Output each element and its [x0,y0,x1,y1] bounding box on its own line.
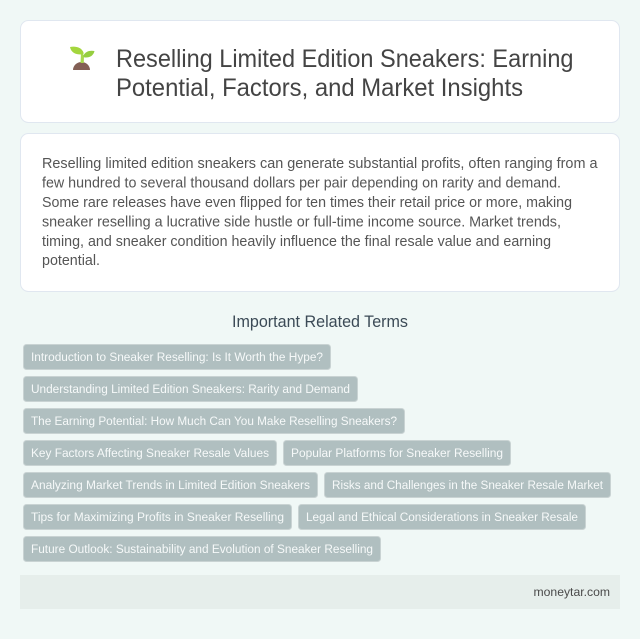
tag: legal and ethical [298,504,586,530]
tag: future outlook [24,536,380,562]
tag: introduction: Introduction to Sneaker Reselling: Is It Worth the Hype? [31,350,323,364]
title heading: Reselling Limited Edition Sneakers: Earning [116,45,574,73]
footer source: moneytar.com [534,585,610,599]
summary text block: sneaker reselling a lucrative side hustle or full-time income source. Market trends, [42,214,561,230]
tag: risks and challenges: Risks and Challenges in the Sneaker Resale Market [332,478,604,492]
summary text block: Reselling limited edition sneakers can generate substantial profits, often ranging from a [42,156,598,172]
tag: market trends [24,472,318,498]
tag: tips [24,504,292,530]
tag: earning potential: The Earning Potential: How Much Can You Make Reselling Sneakers? [31,414,397,428]
tag: understanding: Understanding Limited Edition Sneakers: Rarity and Demand [31,382,350,396]
tag: earning potential [24,408,404,434]
tag: key factors: Key Factors Affecting Sneaker Resale Values [31,446,269,460]
title heading [116,45,574,102]
title heading: Potential, Factors, and Market Insights [116,74,523,102]
related terms tags [24,344,610,562]
tag: key factors [24,440,276,466]
summary text block [42,156,598,269]
panel: summary [20,134,620,292]
icon: sprout [70,47,94,70]
tag: legal and ethical: Legal and Ethical Considerations in Sneaker Resale [306,510,578,524]
tag: understanding [24,376,358,402]
summary text block: timing, and sneaker condition heavily influence the final resale value and earning [42,234,551,250]
tag: introduction [24,344,330,370]
heading: important related terms: Important Related Terms [232,313,408,331]
summary text block: Some rare releases have even flipped for ten times their retail price or more, making [42,195,572,211]
tag: popular platforms: Popular Platforms for Sneaker Reselling [291,446,503,460]
tag: market trends: Analyzing Market Trends in Limited Edition Sneakers [31,478,310,492]
summary text block: few hundred to several thousand dollars per pair depending on rarity and demand. [42,176,561,192]
tag: popular platforms [284,440,510,466]
summary text block: potential. [42,253,100,269]
tag: future outlook: Future Outlook: Sustainability and Evolution of Sneaker Reselling [31,542,373,556]
tag: tips: Tips for Maximizing Profits in Sneaker Reselling [31,510,284,524]
panel: title card [20,20,620,122]
tag: risks and challenges [324,472,610,498]
footer [20,575,620,609]
